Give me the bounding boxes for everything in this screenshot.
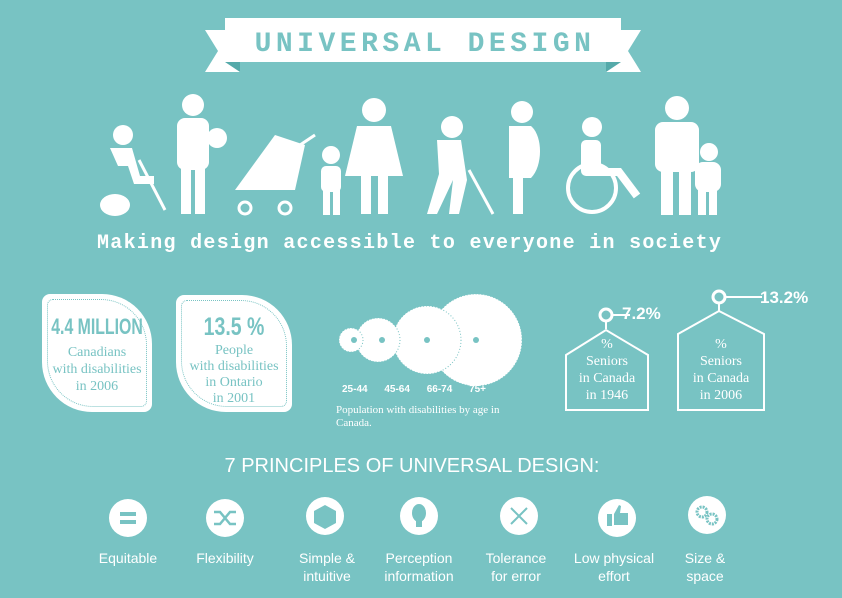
card: 13.5%: 13.5 % <box>204 313 264 341</box>
principles icons row <box>109 496 726 537</box>
principle labels: effort <box>598 568 630 584</box>
tag: seniors 2006: % <box>715 337 727 352</box>
people silhouettes <box>100 94 721 216</box>
card: 13.5%: in Ontario <box>205 375 263 390</box>
tag: seniors 2006: in 2006 <box>700 388 742 403</box>
principle labels <box>99 550 725 584</box>
tag: seniors 1946: % <box>601 337 613 352</box>
card: 4.4 million <box>42 294 152 412</box>
principles heading: 7 PRINCIPLES OF UNIVERSAL DESIGN: <box>225 455 599 477</box>
principle labels: Perception <box>386 550 452 566</box>
card: 13.5%: in 2001 <box>213 391 255 406</box>
tag: seniors 2006: 13.2% <box>760 288 808 307</box>
card: 13.5% <box>176 295 292 412</box>
tag: seniors 1946: in Canada <box>579 371 635 386</box>
card: 4.4 million: 4.4 MILLION <box>51 314 143 339</box>
principle labels: space <box>686 568 724 584</box>
title banner: UNIVERSAL DESIGN <box>255 29 595 60</box>
title banner <box>205 18 641 72</box>
principle labels: for error <box>491 568 541 584</box>
tag: seniors 2006: in Canada <box>693 371 749 386</box>
principle labels: Equitable <box>99 550 157 566</box>
principle labels: information <box>384 568 454 584</box>
principle labels: intuitive <box>303 568 351 584</box>
tag: seniors 2006 <box>677 288 808 411</box>
tag: seniors 2006: Seniors <box>700 354 742 369</box>
principle labels: Simple & <box>299 550 355 566</box>
card: 4.4 million: with disabilities <box>52 362 142 377</box>
tag: seniors 1946 <box>565 304 661 411</box>
card: 13.5%: with disabilities <box>189 359 279 374</box>
principle labels: Flexibility <box>196 550 254 566</box>
card: 13.5%: People <box>215 343 253 358</box>
tag: seniors 1946: Seniors <box>586 354 628 369</box>
chart: population by age <box>336 294 522 429</box>
tag: seniors 1946: 7.2% <box>622 304 661 323</box>
card: 4.4 million: in 2006 <box>76 379 118 394</box>
chart: population by age: 25-44 45-64 66-74 75+ <box>342 384 486 395</box>
principle labels: Size & <box>685 550 725 566</box>
card: 4.4 million: Canadians <box>68 345 126 360</box>
chart: population by age: Population with disabilities by age in Canada. <box>336 404 499 429</box>
tag: seniors 1946: in 1946 <box>586 388 628 403</box>
principle labels: Low physical <box>574 550 654 566</box>
principle labels: Tolerance <box>486 550 546 566</box>
subtitle: Making design accessible to everyone in society <box>97 232 722 255</box>
